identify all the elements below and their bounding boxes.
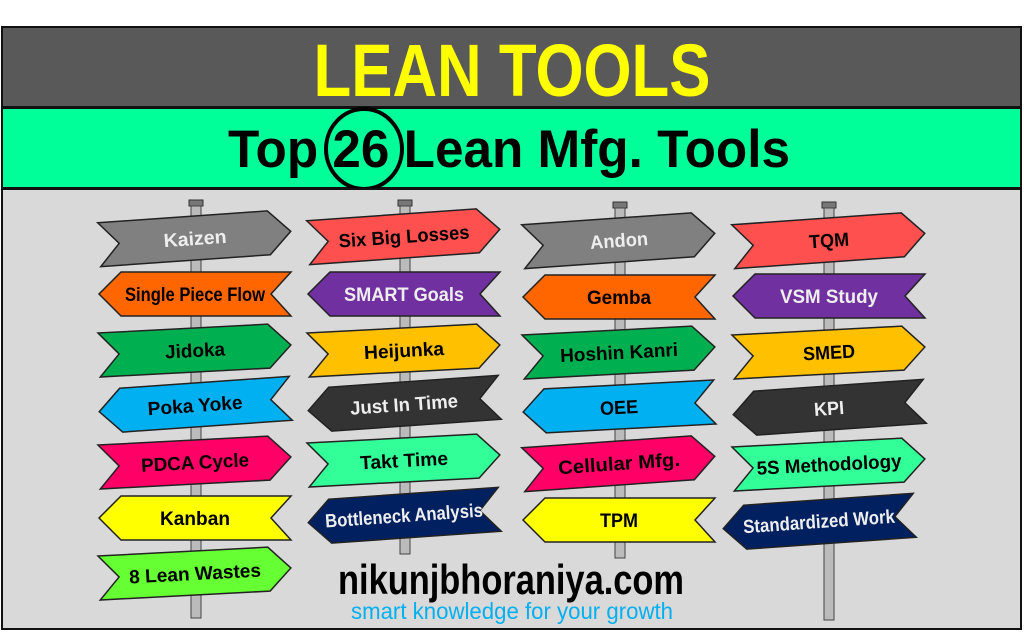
sign: TPM xyxy=(523,498,715,542)
sign: Gemba: Gemba xyxy=(587,288,651,309)
sign: Kaizen: Kaizen xyxy=(163,227,227,252)
header band xyxy=(2,27,1021,112)
sign: Hoshin Kanri: Hoshin Kanri xyxy=(560,340,679,367)
sign: Bottleneck Analysis xyxy=(307,487,501,545)
sign: KPI xyxy=(732,379,926,437)
sign: Poka Yoke: Poka Yoke xyxy=(147,393,243,420)
sign: KPI: KPI xyxy=(813,398,845,421)
pole 2 xyxy=(398,200,412,554)
column 4 signs xyxy=(722,211,926,551)
title: LEAN TOOLS xyxy=(314,29,710,112)
sign: Andon xyxy=(522,211,716,269)
sign: Single Piece Flow: Single Piece Flow xyxy=(125,285,265,306)
sign: Six Big Losses xyxy=(307,207,501,265)
sign: Heijunka xyxy=(307,323,501,377)
pole 1 xyxy=(189,200,203,618)
sign: 5S Methodology: 5S Methodology xyxy=(756,451,902,480)
sign: SMART Goals xyxy=(308,272,500,316)
sign: Just In Time xyxy=(307,375,501,433)
sign: Poka Yoke xyxy=(98,376,292,434)
sign: Jidoka: Jidoka xyxy=(165,339,226,364)
sign: Kanban: Kanban xyxy=(160,509,230,530)
footer: website: nikunjbhoraniya.com xyxy=(338,556,684,603)
footer: website xyxy=(338,556,684,624)
sign: Standardized Work xyxy=(722,493,916,551)
sign: Kaizen xyxy=(98,209,292,267)
sign: Single Piece Flow xyxy=(99,272,291,316)
subtitle: Top 26 Lean Mfg. Tools xyxy=(228,120,790,179)
sign: Bottleneck Analysis: Bottleneck Analysis xyxy=(324,501,484,532)
sign: PDCA Cycle xyxy=(98,435,292,489)
tagline: smart knowledge for your growth xyxy=(351,598,673,624)
sign: Just In Time: Just In Time xyxy=(350,391,459,420)
sign: SMART Goals: SMART Goals xyxy=(344,285,464,306)
sign: Gemba xyxy=(523,275,715,319)
sign: Six Big Losses: Six Big Losses xyxy=(338,222,470,253)
body panel xyxy=(2,189,1021,629)
sign: Kanban xyxy=(99,496,291,540)
column 1 signs xyxy=(98,209,292,600)
sign: Takt Time xyxy=(307,433,501,487)
sign: VSM Study: VSM Study xyxy=(780,287,878,308)
sign: SMED xyxy=(732,325,926,379)
sign: OEE xyxy=(522,380,716,434)
pole 3 xyxy=(613,202,627,558)
column 2 signs xyxy=(307,207,501,545)
sign: 5S Methodology xyxy=(732,437,926,491)
sign: PDCA Cycle: PDCA Cycle xyxy=(141,450,250,477)
subtitle band xyxy=(2,108,1021,189)
sign: TQM xyxy=(732,211,926,269)
sign: SMED: SMED xyxy=(803,342,856,365)
sign: Cellular Mfg. xyxy=(522,434,716,492)
sign: Standardized Work: Standardized Work xyxy=(742,507,896,538)
sign: Andon: Andon xyxy=(589,229,649,254)
sign: VSM Study xyxy=(733,274,925,318)
sign: 8 Lean Wastes: 8 Lean Wastes xyxy=(129,561,262,588)
circle around 26 xyxy=(326,109,402,189)
sign: TQM: TQM xyxy=(808,230,850,253)
column 3 signs xyxy=(522,211,716,542)
sign: TPM: TPM xyxy=(600,511,638,532)
sign: Jidoka xyxy=(98,323,292,377)
sign: Takt Time: Takt Time xyxy=(360,449,449,474)
sign: 8 Lean Wastes xyxy=(98,546,292,600)
sign: Cellular Mfg.: Cellular Mfg. xyxy=(558,450,681,479)
sign: Hoshin Kanri xyxy=(522,325,716,379)
pole 4 xyxy=(822,202,836,620)
sign: OEE: OEE xyxy=(600,397,639,420)
sign: Heijunka: Heijunka xyxy=(364,339,445,364)
